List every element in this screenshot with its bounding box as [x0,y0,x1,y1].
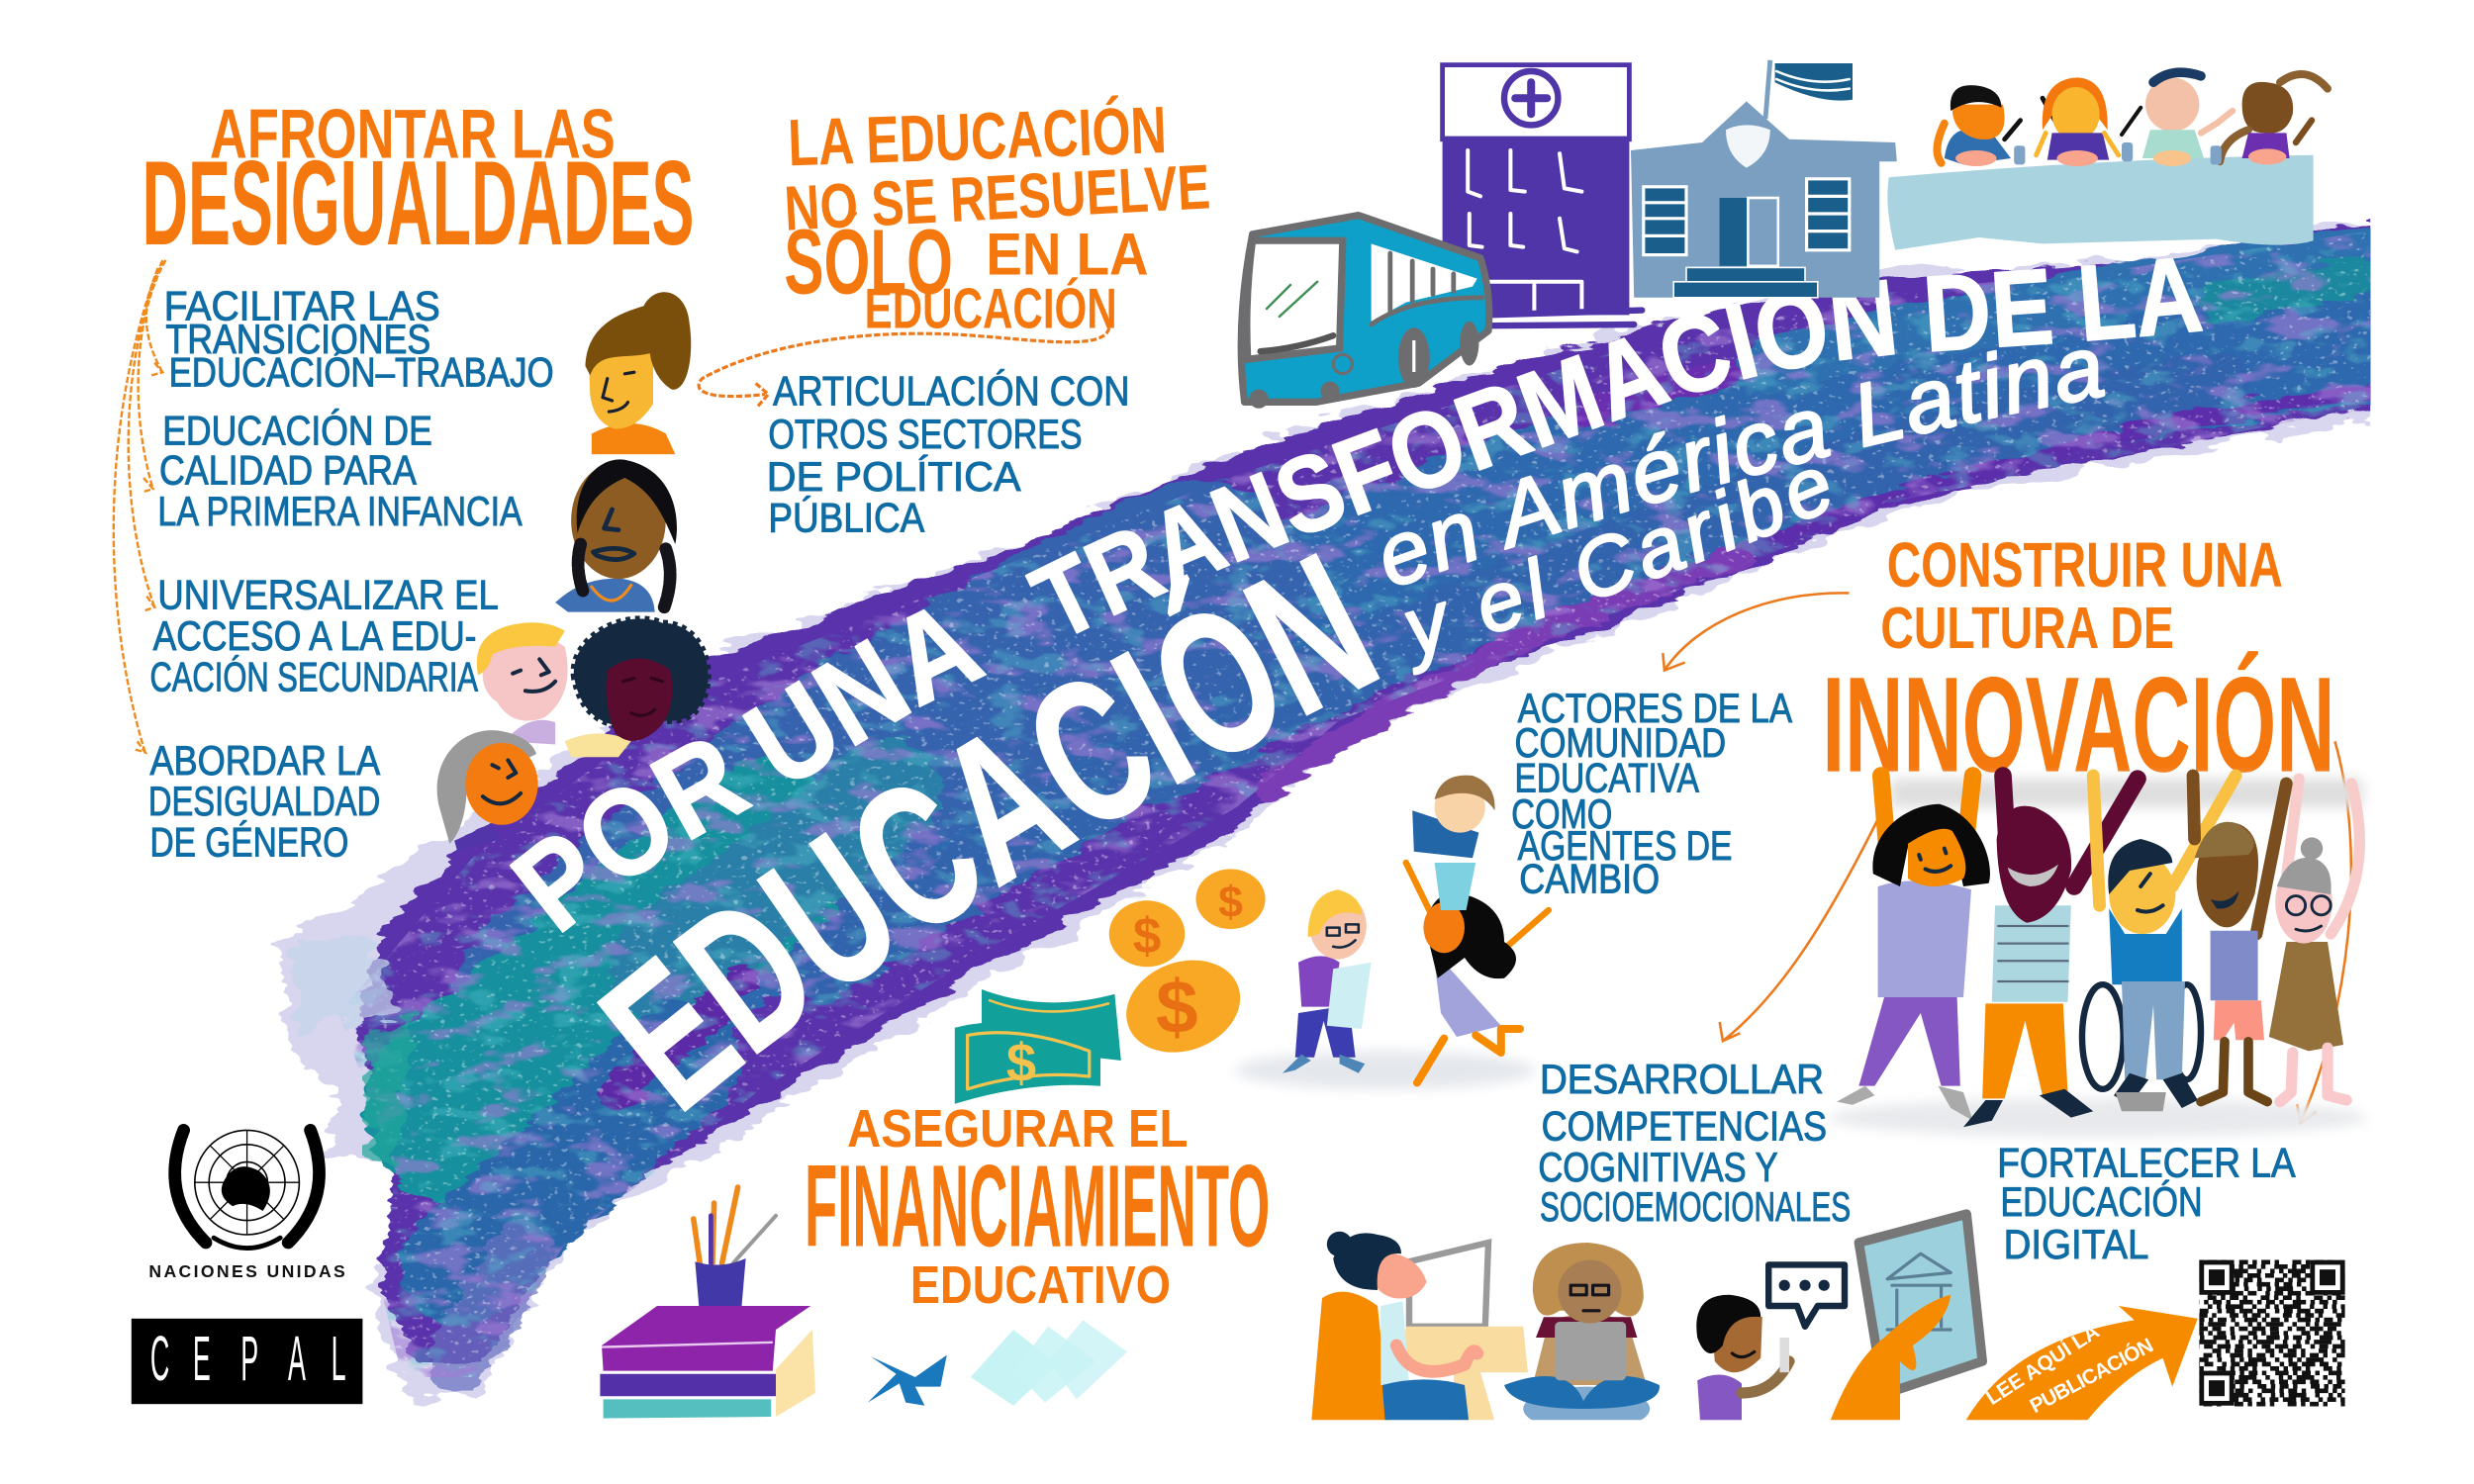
main title [509,257,2203,1112]
icon: papers [971,1320,1127,1406]
heading: la educación no se resuelve solo: LA EDUCACIÓN [787,93,1168,180]
heading: construir una cultura de innovación: CULTURA DE [1880,597,2174,661]
heading: la educación no se resuelve solo: NO SE RESUELVE [783,150,1212,244]
illustration: dining table and children [1887,72,2328,250]
main title: POR UNA [509,609,987,933]
heading: afrontar las desigualdades: DESIGUALDADES [142,136,694,270]
arrow: lee aquí la publicación: PUBLICACIÓN [2026,1333,2157,1418]
illustration: woman with tablet [1504,1243,1660,1431]
heading: asegurar el financiamiento: EDUCATIVO [910,1255,1171,1315]
logo: cepal: CEPAL [150,1325,346,1395]
list: desigualdades: DESIGUALDAD [148,778,380,824]
icon: school [1631,60,1897,298]
list: desigualdades: CALIDAD PARA [159,446,417,493]
text: articulación: ARTICULACIÓN CON [773,368,1129,415]
heading: la educación no se resuelve solo: EDUCACIÓN [865,278,1117,341]
dashed arrows: desigualdades list [114,260,165,752]
list: desigualdades: UNIVERSALIZAR EL [157,571,499,617]
faces: ponytail woman [585,292,691,454]
list: desigualdades: LA PRIMERA INFANCIA [157,488,523,534]
logo: cepal [132,1319,362,1404]
illustration: group with raised arms [1829,776,2367,1137]
icon: hospital [1436,65,1642,326]
text: fortalecer educación digital: FORTALECER LA [1997,1139,2296,1185]
text: articulación: DE POLÍTICA [767,453,1021,500]
text: articulación: PÚBLICA [768,494,925,540]
heading: afrontar las desigualdades: AFRONTAR LAS [210,95,616,172]
list: desigualdades: DE GÉNERO [149,819,348,866]
dashed arrow: articulación [699,328,1109,407]
main title: y el Caribe [1404,469,1830,675]
list: desigualdades: TRANSICIONES [165,316,430,362]
heading: asegurar el financiamiento [805,1099,1270,1315]
brush stroke band [269,206,2391,1409]
list: desigualdades [148,283,554,866]
list: desigualdades: EDUCACIÓN–TRABAJO [169,349,554,396]
icon: ribbon [868,1355,947,1406]
faces: curly hair [565,619,709,757]
text: desarrollar competencias: COMPETENCIAS [1542,1103,1827,1150]
arrows: innovación [1663,593,2351,1123]
list: desigualdades: CACIÓN SECUNDARIA [149,653,478,699]
icons: coins: $ [1156,966,1198,1050]
text: FINANCIAMIENTO [805,1140,1270,1270]
text: articulación: OTROS SECTORES [768,411,1083,457]
icon: banknotes: $ [1006,1033,1036,1093]
text: desarrollar competencias: DESARROLLAR [1540,1056,1824,1102]
illustration: tablet and hand [1829,1214,1982,1427]
list: desigualdades: ABORDAR LA [149,737,381,784]
text: fortalecer educación digital: DIGITAL [2004,1221,2148,1267]
logo: united nations emblem [148,1130,345,1281]
text: desarrollar competencias: COGNITIVAS Y [1538,1144,1778,1190]
text: actores: AGENTES DE [1518,822,1732,869]
text: desarrollar competencias: SOCIOEMOCIONALES [1540,1183,1851,1230]
illustration: boy with phone and speech bubble [1696,1264,1845,1427]
icon: books and pencils [600,1187,815,1419]
text: actores: COMO [1511,790,1612,837]
icon: bus [1241,216,1489,409]
icons: coins: $ [1218,878,1243,926]
heading: asegurar el financiamiento: ASEGURAR EL [847,1099,1188,1159]
heading: construir una cultura de innovación [1822,529,2334,801]
text: actores: EDUCATIVA [1514,754,1699,800]
arrow: lee aquí la publicación [1963,1306,2198,1425]
text: actores: ACTORES DE LA [1518,685,1792,731]
main title: en América Latina [1383,350,2106,586]
list: desigualdades: FACILITAR LAS [164,283,440,329]
list: desigualdades: ACCESO A LA EDU- [153,612,476,659]
heading: construir una cultura de innovación: CONSTRUIR UNA [1887,529,2283,601]
illustration: woman at computer [1311,1232,1528,1427]
text: actores [1511,685,1792,901]
text: articulación [767,368,1129,540]
text: desarrollar competencias [1538,1056,1851,1230]
heading: afrontar las desigualdades [142,95,694,270]
main title: TRANSFORMACIÓN DE LA [1025,257,2203,634]
text: fortalecer educación digital [1997,1139,2296,1267]
arrow: lee aquí la publicación: LEE AQUÍ LA [1982,1320,2104,1410]
illustration: children with book [1235,776,1549,1089]
icons: coins: $ [1133,907,1161,964]
list: desigualdades: EDUCACIÓN DE [162,408,432,454]
faces: blond boy [477,622,568,744]
qr code [2199,1260,2345,1406]
icons: coins [1109,869,1266,1067]
text: actores: COMUNIDAD [1514,719,1726,766]
text: fortalecer educación digital: EDUCACIÓN [2000,1178,2203,1225]
faces: braids woman [555,459,677,612]
heading: la educación no se resuelve solo [783,93,1212,341]
heading: la educación no se resuelve solo: SÓLO [784,211,953,314]
main title: EDUCACIÓN [597,553,1380,1112]
faces: grey hair [437,730,538,852]
text: actores: CAMBIO [1519,855,1660,901]
icon: banknotes [956,989,1121,1102]
logo: united nations emblem: NACIONES UNIDAS [148,1261,345,1281]
heading: la educación no se resuelve solo: EN LA [986,220,1149,287]
